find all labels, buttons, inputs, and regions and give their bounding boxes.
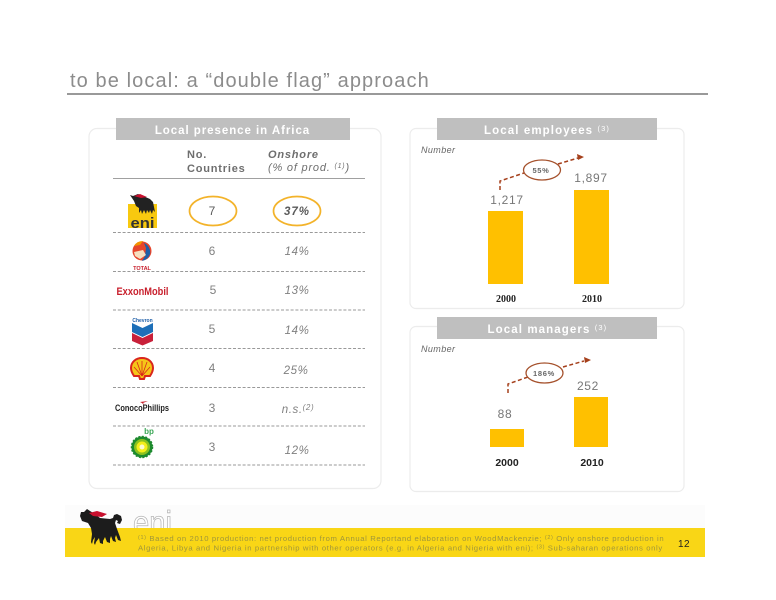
growth arrow: 55%: 55% [532, 166, 550, 175]
heading: local employees: (3) [597, 124, 610, 133]
heading: local managers: Local managers [488, 324, 590, 336]
bar chart: managers: 252 [577, 379, 599, 393]
panel: local presence in Africa [89, 118, 381, 488]
heading: local presence [116, 118, 350, 140]
logo: exxonmobil: ExxonMobil [116, 286, 168, 298]
logo: bp [132, 427, 154, 458]
bar chart: employees: 1,897 [574, 171, 608, 185]
bar chart: employees [488, 171, 609, 305]
countries column: 7 [209, 204, 216, 218]
column heading: no. countries: Countries [187, 163, 246, 175]
footer band [65, 504, 705, 557]
logo: eni: eni [130, 215, 154, 232]
onshore column: 12% [285, 445, 309, 457]
column heading: onshore [268, 149, 350, 174]
footnote text: (1) [138, 535, 147, 541]
logo: shell [131, 358, 153, 379]
bar chart: managers: 2000 [495, 457, 519, 469]
footnote text: (3) [536, 544, 545, 550]
growth arrow: 186%: 186% [533, 369, 555, 378]
growth arrow: 55% [500, 154, 584, 190]
logo: eni [128, 194, 157, 232]
logo: total [132, 241, 152, 272]
unit label: Number [421, 145, 456, 155]
footnote text: Sub-saharan operations only [545, 544, 663, 552]
bar chart: managers: 88 [498, 407, 512, 421]
title: to be local: a “double flag” approach [70, 70, 430, 92]
onshore column: 14% [285, 325, 309, 337]
countries column: 3 [209, 401, 216, 415]
panel: local managers [410, 317, 684, 492]
logo: chevron [132, 318, 153, 346]
onshore column: n.s. [282, 404, 303, 416]
countries column [209, 204, 217, 454]
growth arrow: 186% [508, 357, 591, 393]
onshore column [282, 206, 314, 457]
column heading: onshore: (1) [334, 163, 345, 170]
heading: local presence: Local presence in Africa [155, 125, 310, 137]
bar chart: employees: 2010 [582, 294, 602, 305]
heading: local managers: (3) [595, 323, 607, 332]
column heading: onshore: ) [343, 162, 350, 174]
heading: local employees: Local employees [484, 125, 593, 137]
logo: conocophillips: ConocoPhillips [115, 403, 169, 413]
bar chart: employees: 1,217 [490, 193, 524, 207]
column heading: no. countries: No. [187, 149, 207, 161]
logo: total: TOTAL [133, 266, 152, 272]
bar chart: employees: 2000 [496, 294, 516, 305]
footnote text: Algeria, Libya and Nigeria in partnership with other operators (e.g. in Algeria and Nigeria with eni); [138, 544, 534, 552]
column heading: no. countries [187, 149, 246, 175]
bar chart: managers [490, 379, 608, 469]
footnote text [138, 534, 664, 552]
column heading: onshore: (% of prod. [268, 162, 331, 174]
footnote text: Only onshore production in [554, 534, 664, 543]
countries column: 5 [209, 322, 216, 336]
footer logo: eni wordmark: eni [133, 504, 172, 541]
logo: chevron: Chevron [132, 318, 153, 324]
logo: bp: bp [144, 427, 154, 436]
bar chart: managers: 2010 [580, 457, 604, 469]
countries column: 3 [209, 440, 216, 454]
countries column: 5 [210, 283, 217, 297]
onshore column: 13% [285, 285, 309, 297]
onshore column: 37% [284, 206, 310, 218]
column heading: onshore: Onshore [268, 149, 319, 161]
heading: local employees [437, 118, 657, 140]
onshore column: 14% [285, 246, 309, 258]
unit label: Number [421, 344, 456, 354]
heading: local managers [437, 317, 657, 339]
footer logo: six-legged dog [80, 509, 122, 545]
footnote text: Based on 2010 production: net production from Annual Reportand elaboration on WoodMackenzie; [147, 534, 545, 543]
highlight ovals [190, 196, 320, 226]
footnote text: (2) [545, 535, 554, 541]
countries column: 6 [209, 244, 216, 258]
countries column: 4 [209, 361, 216, 375]
page number: 12 [678, 539, 690, 550]
onshore column: 25% [283, 365, 308, 377]
panel: local employees [410, 118, 684, 308]
onshore column: (2) [303, 403, 314, 412]
